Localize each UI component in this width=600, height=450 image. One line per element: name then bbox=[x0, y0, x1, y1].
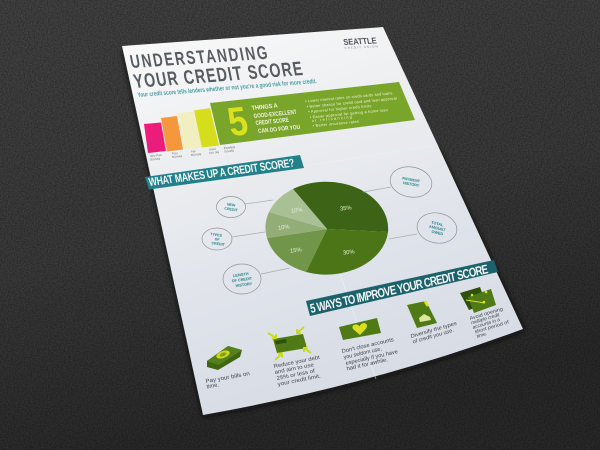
text: diversify the types bbox=[410, 321, 458, 345]
bar: fair bbox=[178, 112, 202, 150]
logo: Seattle Credit Union: SEATTLE bbox=[342, 35, 378, 47]
text: avoid opening: multiple credit bbox=[471, 312, 500, 326]
text: don't close accounts: Don’t close accounts bbox=[341, 337, 395, 355]
icon: stack of cash bbox=[207, 346, 242, 370]
banner bullets: • Better insurance rates bbox=[312, 120, 359, 128]
banner bullets: • Easier approval for getting a home loan bbox=[309, 108, 388, 119]
green banner: 5 things bbox=[210, 82, 415, 145]
text: don't close accounts bbox=[341, 337, 398, 372]
bar: good bbox=[194, 108, 219, 148]
callout: length of credit history bbox=[223, 264, 261, 294]
callout: payment history: HISTORY bbox=[403, 181, 420, 188]
callout: new credit: CREDIT bbox=[224, 207, 239, 213]
pie percentage labels: 10% bbox=[278, 224, 290, 232]
text: reduce your debt: and aim to use bbox=[274, 362, 314, 376]
text: reduce your debt: Reduce your debt bbox=[273, 355, 321, 370]
banner bullets: • Lower interest rates on credit cards and loans bbox=[305, 91, 393, 103]
pie percentage labels: 10% bbox=[291, 207, 303, 215]
text: avoid opening bbox=[469, 306, 510, 340]
callout: total amount owed: OWED bbox=[431, 230, 444, 236]
slice: 10% types of credit bbox=[265, 212, 327, 238]
callout: length of credit history: HISTORY bbox=[235, 282, 253, 288]
banner heading bbox=[251, 103, 301, 135]
subtitle: Your credit score tells lenders whether or not you’re a good risk for more credit. bbox=[137, 78, 318, 99]
text: avoid opening: accounts in a bbox=[472, 317, 501, 331]
slice: 30% total amount owed bbox=[306, 229, 388, 275]
bar labels: Excellent bbox=[223, 145, 236, 150]
title: UNDERSTANDING bbox=[128, 43, 269, 73]
callout: types of credit bbox=[202, 228, 232, 250]
callout: length of credit history: LENGTH bbox=[233, 272, 249, 278]
credit score range bars bbox=[144, 108, 236, 161]
text: don't close accounts: had it for awhile. bbox=[346, 357, 389, 372]
callout: types of credit: TYPES bbox=[210, 232, 223, 238]
bar labels: Fair bbox=[190, 149, 196, 153]
callout: new credit: NEW bbox=[227, 202, 236, 208]
bar labels: Poor bbox=[171, 151, 178, 155]
bar labels: 700-749 bbox=[208, 150, 220, 155]
bar labels bbox=[149, 145, 236, 161]
text: reduce your debt: your credit limit. bbox=[277, 373, 322, 388]
icon: shrinking credit card bbox=[268, 327, 311, 360]
pie percentage labels bbox=[278, 205, 355, 257]
callout: new credit bbox=[216, 196, 246, 218]
banner heading: CAN DO FOR YOU bbox=[258, 125, 301, 135]
logo: Seattle Credit Union: CREDIT UNION bbox=[344, 44, 378, 50]
banner bullets: or refinancing bbox=[311, 115, 352, 123]
pie chart bbox=[265, 182, 388, 275]
bar labels: Good bbox=[208, 147, 216, 151]
banner heading: CREDIT SCORE bbox=[255, 118, 289, 127]
bar labels: 750-850 bbox=[223, 149, 235, 153]
icon: document with house bbox=[407, 301, 437, 328]
text: pay your bills bbox=[205, 371, 250, 390]
text: diversify the types: of credit you use. bbox=[412, 328, 454, 345]
heading: 5 ways to improve your credit score: 5 WAYS TO IMPROVE YOUR CREDIT SCORE bbox=[309, 263, 490, 316]
icon: card with heart bbox=[339, 318, 381, 340]
callout: payment history bbox=[388, 164, 434, 200]
banner heading: GOOD-EXCELLENT bbox=[253, 110, 298, 120]
heading: what makes up a credit score: WHAT MAKES UP A CREDIT SCORE? bbox=[148, 157, 296, 189]
banner heading: THINGS A bbox=[251, 103, 279, 112]
text: pay your bills: Pay your bills on bbox=[205, 371, 250, 385]
big numeral 5: 5 bbox=[224, 98, 252, 145]
bar labels: 650-699 bbox=[190, 152, 202, 157]
pie percentage labels: 15% bbox=[290, 247, 302, 255]
slice: 10% new credit bbox=[269, 189, 327, 229]
text: diversify the types: Diversify the types bbox=[410, 321, 458, 340]
banner bullets bbox=[305, 91, 397, 128]
text: avoid opening: Avoid opening bbox=[469, 306, 504, 322]
callout: length of credit history: OF CREDIT bbox=[231, 277, 253, 283]
pie percentage labels: 30% bbox=[343, 249, 355, 257]
paper sheet bbox=[122, 27, 523, 415]
banner bullets: • Approval for higher credit limits bbox=[308, 104, 372, 114]
text: reduce your debt: 25% or less of bbox=[276, 368, 316, 382]
title: YOUR CREDIT SCORE bbox=[131, 57, 304, 93]
bar labels: 550-649 bbox=[171, 154, 183, 159]
paper shadow bbox=[122, 50, 525, 417]
text: don't close accounts: especially if you have bbox=[345, 349, 398, 367]
callout: total amount owed: TOTAL bbox=[431, 221, 444, 228]
slice: 35% payment history bbox=[293, 182, 388, 232]
icon: two accounts with arrows bbox=[460, 287, 496, 313]
leader lines bbox=[232, 187, 417, 274]
callout: total amount owed: AMOUNT bbox=[429, 225, 446, 233]
pie percentage labels: 35% bbox=[340, 205, 352, 213]
slice: 15% length of credit history bbox=[267, 229, 327, 272]
banner bullets: • Better chance for credit card and loan approval bbox=[306, 96, 397, 109]
text: don't close accounts: you seldom use, bbox=[343, 346, 383, 361]
callout: payment history: PAYMENT bbox=[402, 176, 421, 184]
bar: very poor bbox=[144, 122, 166, 153]
text: pay your bills: time. bbox=[206, 382, 220, 390]
callout: types of credit: OF bbox=[214, 237, 221, 242]
bar: poor bbox=[161, 116, 183, 152]
bar labels: Very Poor bbox=[149, 153, 163, 158]
bar labels: 300-549 bbox=[149, 157, 161, 161]
callout: total amount owed bbox=[415, 210, 459, 246]
text: avoid opening: time. bbox=[476, 331, 488, 340]
icon arrows bbox=[268, 327, 311, 360]
callout: types of credit: CREDIT bbox=[211, 241, 226, 247]
text: avoid opening: short period of bbox=[474, 319, 510, 335]
text: reduce your debt bbox=[273, 355, 322, 388]
